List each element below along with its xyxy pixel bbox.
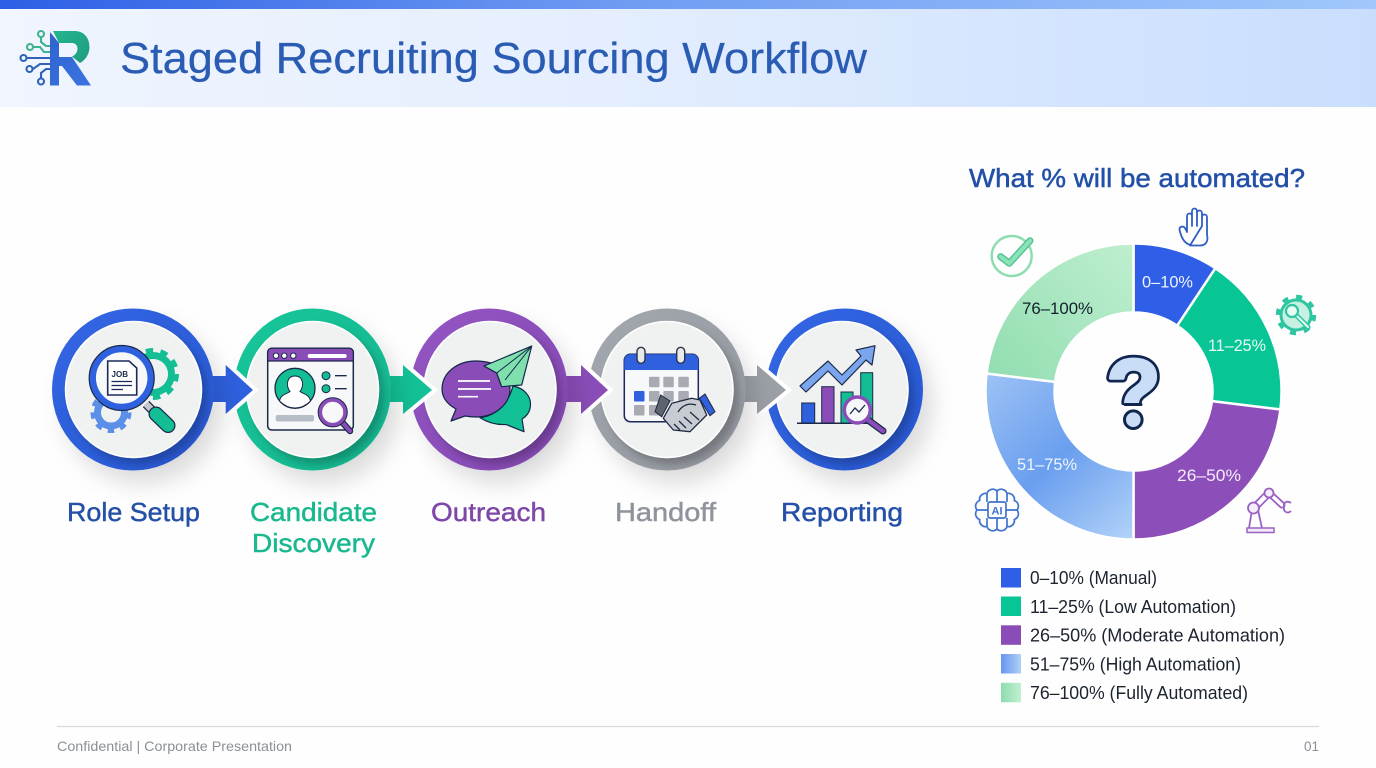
header band: [0, 0, 1376, 107]
label: handoff: Handoff: [615, 497, 717, 527]
title: Staged Recruiting Sourcing Workflow: [120, 34, 867, 83]
value: 0-10%: 0–10%: [1142, 272, 1193, 292]
step 4 ring: handoff: [588, 308, 746, 470]
arrow: handoff to reporting: [730, 365, 786, 414]
label: outreach: Outreach: [431, 497, 546, 527]
value: 76-100%: 76–100%: [1022, 299, 1093, 318]
legend item: moderate automation: 26–50% (Moderate Automation): [1030, 626, 1285, 646]
segment: 51-75%: [986, 374, 1134, 540]
step 3 ring: outreach: [410, 308, 568, 470]
icon: reporting chart: [797, 346, 883, 431]
label: reporting: Reporting: [781, 497, 903, 527]
step 2 ring: candidate discovery: [234, 308, 391, 470]
label: role setup: Role Setup: [67, 497, 200, 527]
icon: question mark: ?: [1107, 341, 1160, 440]
segment: 0-10%: [1134, 244, 1215, 326]
icon: job search with gears: JOB: [112, 369, 128, 379]
icon: candidate profile window: [268, 348, 353, 431]
icon: AI brain: [976, 489, 1018, 531]
icon: job search with gears: [89, 346, 176, 431]
label: candidate discovery: [250, 497, 377, 558]
icon: question mark: ?: [1107, 341, 1160, 440]
chart heading: What % will be automated?: [969, 163, 1305, 193]
legend item: low automation: 11–25% (Low Automation): [1030, 597, 1236, 617]
legend: [1001, 568, 1285, 703]
logo: [20, 31, 91, 86]
value: 11-25%: 11–25%: [1208, 336, 1266, 355]
segment: 11-25%: [1177, 268, 1282, 410]
value: 26-50%: 26–50%: [1177, 466, 1241, 485]
value: 51-75%: 51–75%: [1017, 455, 1077, 474]
icon: manual hand: [1179, 208, 1207, 246]
label: candidate discovery: Candidate: [250, 497, 377, 527]
icon: automation gear with wrench: [1278, 297, 1314, 333]
legend item: high automation: 51–75% (High Automation): [1030, 654, 1241, 674]
segment: 26-50%: [1134, 401, 1280, 540]
page number: 01: [1304, 738, 1319, 754]
segment: 76-100%: [987, 244, 1134, 382]
arrow: role setup to candidate discovery: [198, 365, 253, 414]
legend item: fully automated: 76–100% (Fully Automated): [1030, 683, 1248, 703]
step labels: [67, 497, 903, 558]
arrow: candidate discovery to outreach: [376, 365, 432, 414]
icon: chat bubbles and paper plane: [442, 346, 532, 432]
donut chart: [986, 244, 1282, 540]
workflow process chain: [52, 308, 923, 470]
legend item: manual: 0–10% (Manual): [1030, 568, 1157, 588]
step 1 ring: role setup: [52, 308, 214, 470]
icon: calendar with handshake: [624, 347, 715, 432]
arrow: outreach to handoff: [552, 365, 608, 414]
icon: fully automated check: [992, 236, 1032, 276]
step 5 ring: reporting: [766, 308, 923, 470]
footer text: Confidential | Corporate Presentation: [57, 738, 292, 754]
label: candidate discovery: Discovery: [252, 528, 375, 558]
icon: AI brain: AI: [992, 506, 1002, 518]
icon: robot arm: [1247, 488, 1291, 532]
